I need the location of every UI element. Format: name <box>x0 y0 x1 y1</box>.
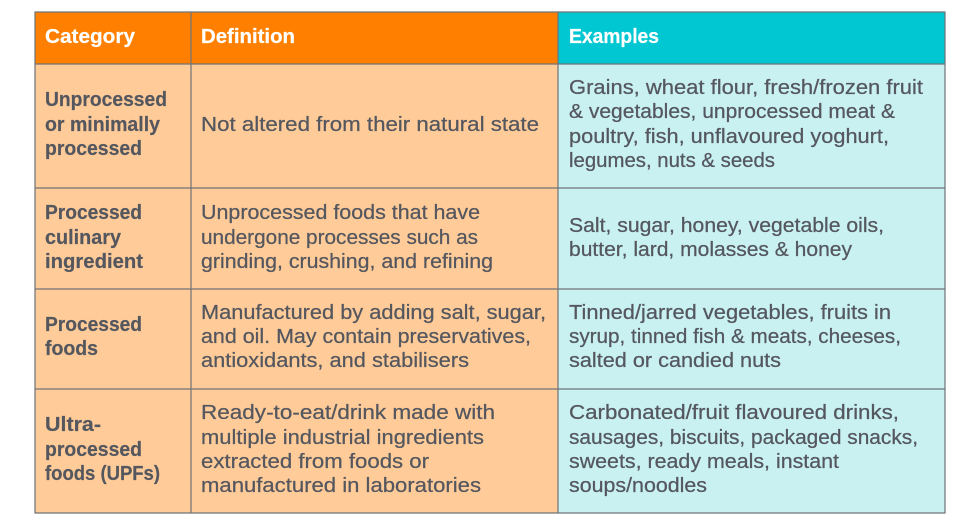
row 2: processed culinary ingredient: Processed <box>45 202 142 224</box>
header row <box>35 12 945 64</box>
row 2: processed culinary ingredient: Salt, sugar, honey, vegetable oils, <box>569 215 884 237</box>
row 4: ultra-processed foods: foods (UPFs) <box>45 463 160 485</box>
row 4: ultra-processed foods: soups/noodles <box>569 475 707 497</box>
row 3: processed foods: salted or candied nuts <box>569 350 781 372</box>
row 3: processed foods: and oil. May contain preservatives, <box>201 326 531 348</box>
header row: Definition <box>201 26 295 48</box>
row 1: unprocessed or minimally processed: Unprocessed <box>45 89 167 111</box>
header row: Category <box>45 26 136 48</box>
row 3: processed foods: antioxidants, and stabilisers <box>201 350 469 372</box>
row 4: ultra-processed foods: sweets, ready meals, instant <box>569 451 839 473</box>
row 2: processed culinary ingredient: grinding, crushing, and refining <box>201 251 493 273</box>
row 1: unprocessed or minimally processed <box>35 64 945 188</box>
row 2: processed culinary ingredient: Unprocessed foods that have <box>201 202 480 224</box>
row 4: ultra-processed foods <box>35 389 945 513</box>
row 2: processed culinary ingredient: butter, lard, molasses & honey <box>569 239 852 261</box>
row 4: ultra-processed foods: multiple industrial ingredients <box>201 427 484 449</box>
row 4: ultra-processed foods: processed <box>45 439 142 461</box>
row 3: processed foods: Processed <box>45 314 142 336</box>
row 3: processed foods: Manufactured by adding salt, sugar, <box>201 302 546 324</box>
row 2: processed culinary ingredient <box>35 188 945 289</box>
row 3: processed foods: foods <box>45 338 98 360</box>
header row: Examples <box>569 26 659 48</box>
row 1: unprocessed or minimally processed: & vegetables, unprocessed meat & <box>569 101 896 123</box>
row 1: unprocessed or minimally processed: legumes, nuts & seeds <box>569 150 775 172</box>
row 4: ultra-processed foods: Ready-to-eat/drink made with <box>201 402 495 424</box>
row 4: ultra-processed foods: Ultra- <box>45 414 101 436</box>
row 3: processed foods <box>35 289 945 389</box>
row 3: processed foods: syrup, tinned fish & meats, cheeses, <box>569 326 901 348</box>
row 4: ultra-processed foods: extracted from foods or <box>201 451 429 473</box>
row 4: ultra-processed foods: sausages, biscuits, packaged snacks, <box>569 427 918 449</box>
row 3: processed foods: Tinned/jarred vegetables, fruits in <box>569 302 891 324</box>
row 4: ultra-processed foods: manufactured in laboratories <box>201 475 481 497</box>
row 1: unprocessed or minimally processed: Grains, wheat flour, fresh/frozen fruit <box>569 77 923 99</box>
row 1: unprocessed or minimally processed: Not altered from their natural state <box>201 114 539 136</box>
row 1: unprocessed or minimally processed: processed <box>45 138 142 160</box>
row 2: processed culinary ingredient: ingredient <box>45 251 143 273</box>
row 2: processed culinary ingredient: culinary <box>45 227 122 249</box>
row 1: unprocessed or minimally processed: poultry, fish, unflavoured yoghurt, <box>569 126 889 148</box>
row 1: unprocessed or minimally processed: or minimally <box>45 114 161 136</box>
row 2: processed culinary ingredient: undergone processes such as <box>201 227 478 249</box>
row 4: ultra-processed foods: Carbonated/fruit flavoured drinks, <box>569 402 899 424</box>
